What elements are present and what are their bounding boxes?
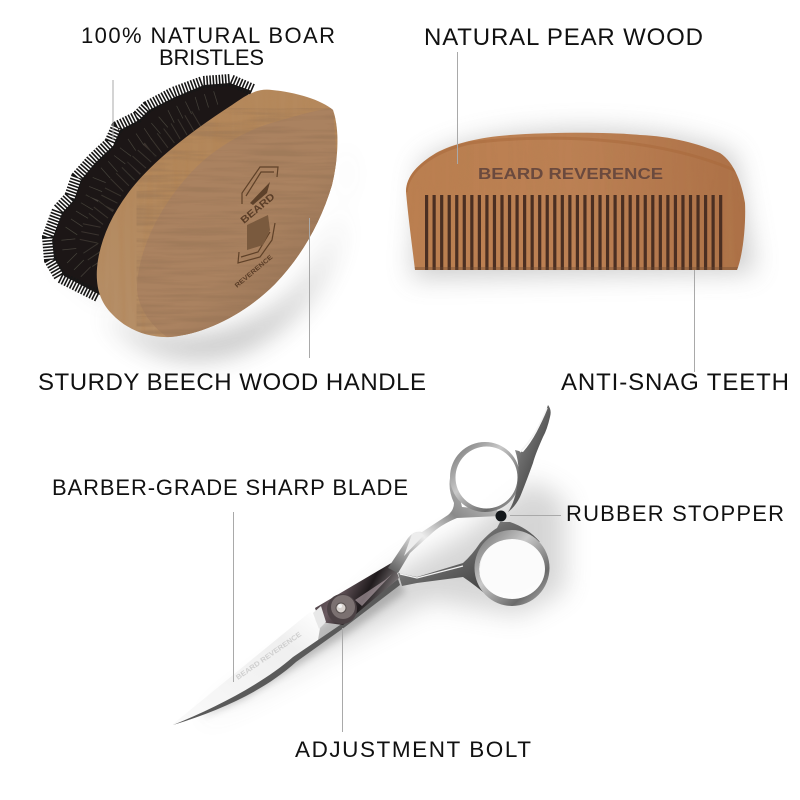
brush shadow	[105, 140, 348, 357]
brush: boar bristle beard brush	[48, 80, 350, 357]
scissors shadow	[195, 480, 565, 725]
label: adjustment bolt: ADJUSTMENT BOLT	[295, 737, 531, 762]
label: sturdy beech wood handle: STURDY BEECH WOOD HANDLE	[38, 369, 426, 396]
label: rubber stopper: RUBBER STOPPER	[566, 501, 784, 526]
leader lines	[113, 52, 694, 732]
finger rest tang	[508, 405, 551, 512]
blade shank	[315, 562, 399, 625]
label: natural boar bristles: BRISTLES	[159, 45, 264, 70]
lower arm	[398, 522, 540, 598]
engraved logo: REVERENCE	[234, 253, 275, 290]
blade lower dark edge	[173, 579, 400, 725]
comb shadow	[412, 130, 755, 278]
thumb ring	[450, 442, 520, 512]
bristles	[48, 80, 253, 296]
engraved logo	[234, 167, 278, 290]
wood grain on face	[137, 108, 350, 345]
comb: pear wood comb	[400, 128, 755, 278]
rubber stopper	[496, 510, 506, 522]
label: barber-grade sharp blade: BARBER-GRADE SHARP BLADE	[52, 475, 408, 500]
comb teeth gaps	[425, 195, 723, 271]
adjustment bolt	[327, 594, 357, 624]
thumb ring opening	[456, 446, 518, 508]
finger ring opening	[479, 539, 545, 599]
label: natural pear wood: NATURAL PEAR WOOD	[424, 24, 703, 51]
comb logo text: BEARD REVERENCE	[478, 166, 663, 183]
wooden body	[96, 90, 338, 338]
label: natural boar bristles: 100% NATURAL BOAR	[81, 23, 335, 48]
label: anti-snag teeth: ANTI-SNAG TEETH	[561, 369, 789, 396]
engraved logo: BEARD	[239, 192, 277, 226]
wooden face	[137, 108, 350, 345]
label: natural boar bristles	[81, 23, 335, 70]
blade light face	[173, 612, 320, 725]
upper arm	[388, 478, 500, 573]
comb body	[406, 132, 746, 270]
blade engraving: BEARD REVERENCE	[235, 631, 303, 682]
scissors: barber shears	[173, 405, 565, 725]
finger ring	[474, 530, 550, 606]
wood grain on side band	[122, 90, 338, 334]
comb top edge highlight	[406, 138, 745, 192]
